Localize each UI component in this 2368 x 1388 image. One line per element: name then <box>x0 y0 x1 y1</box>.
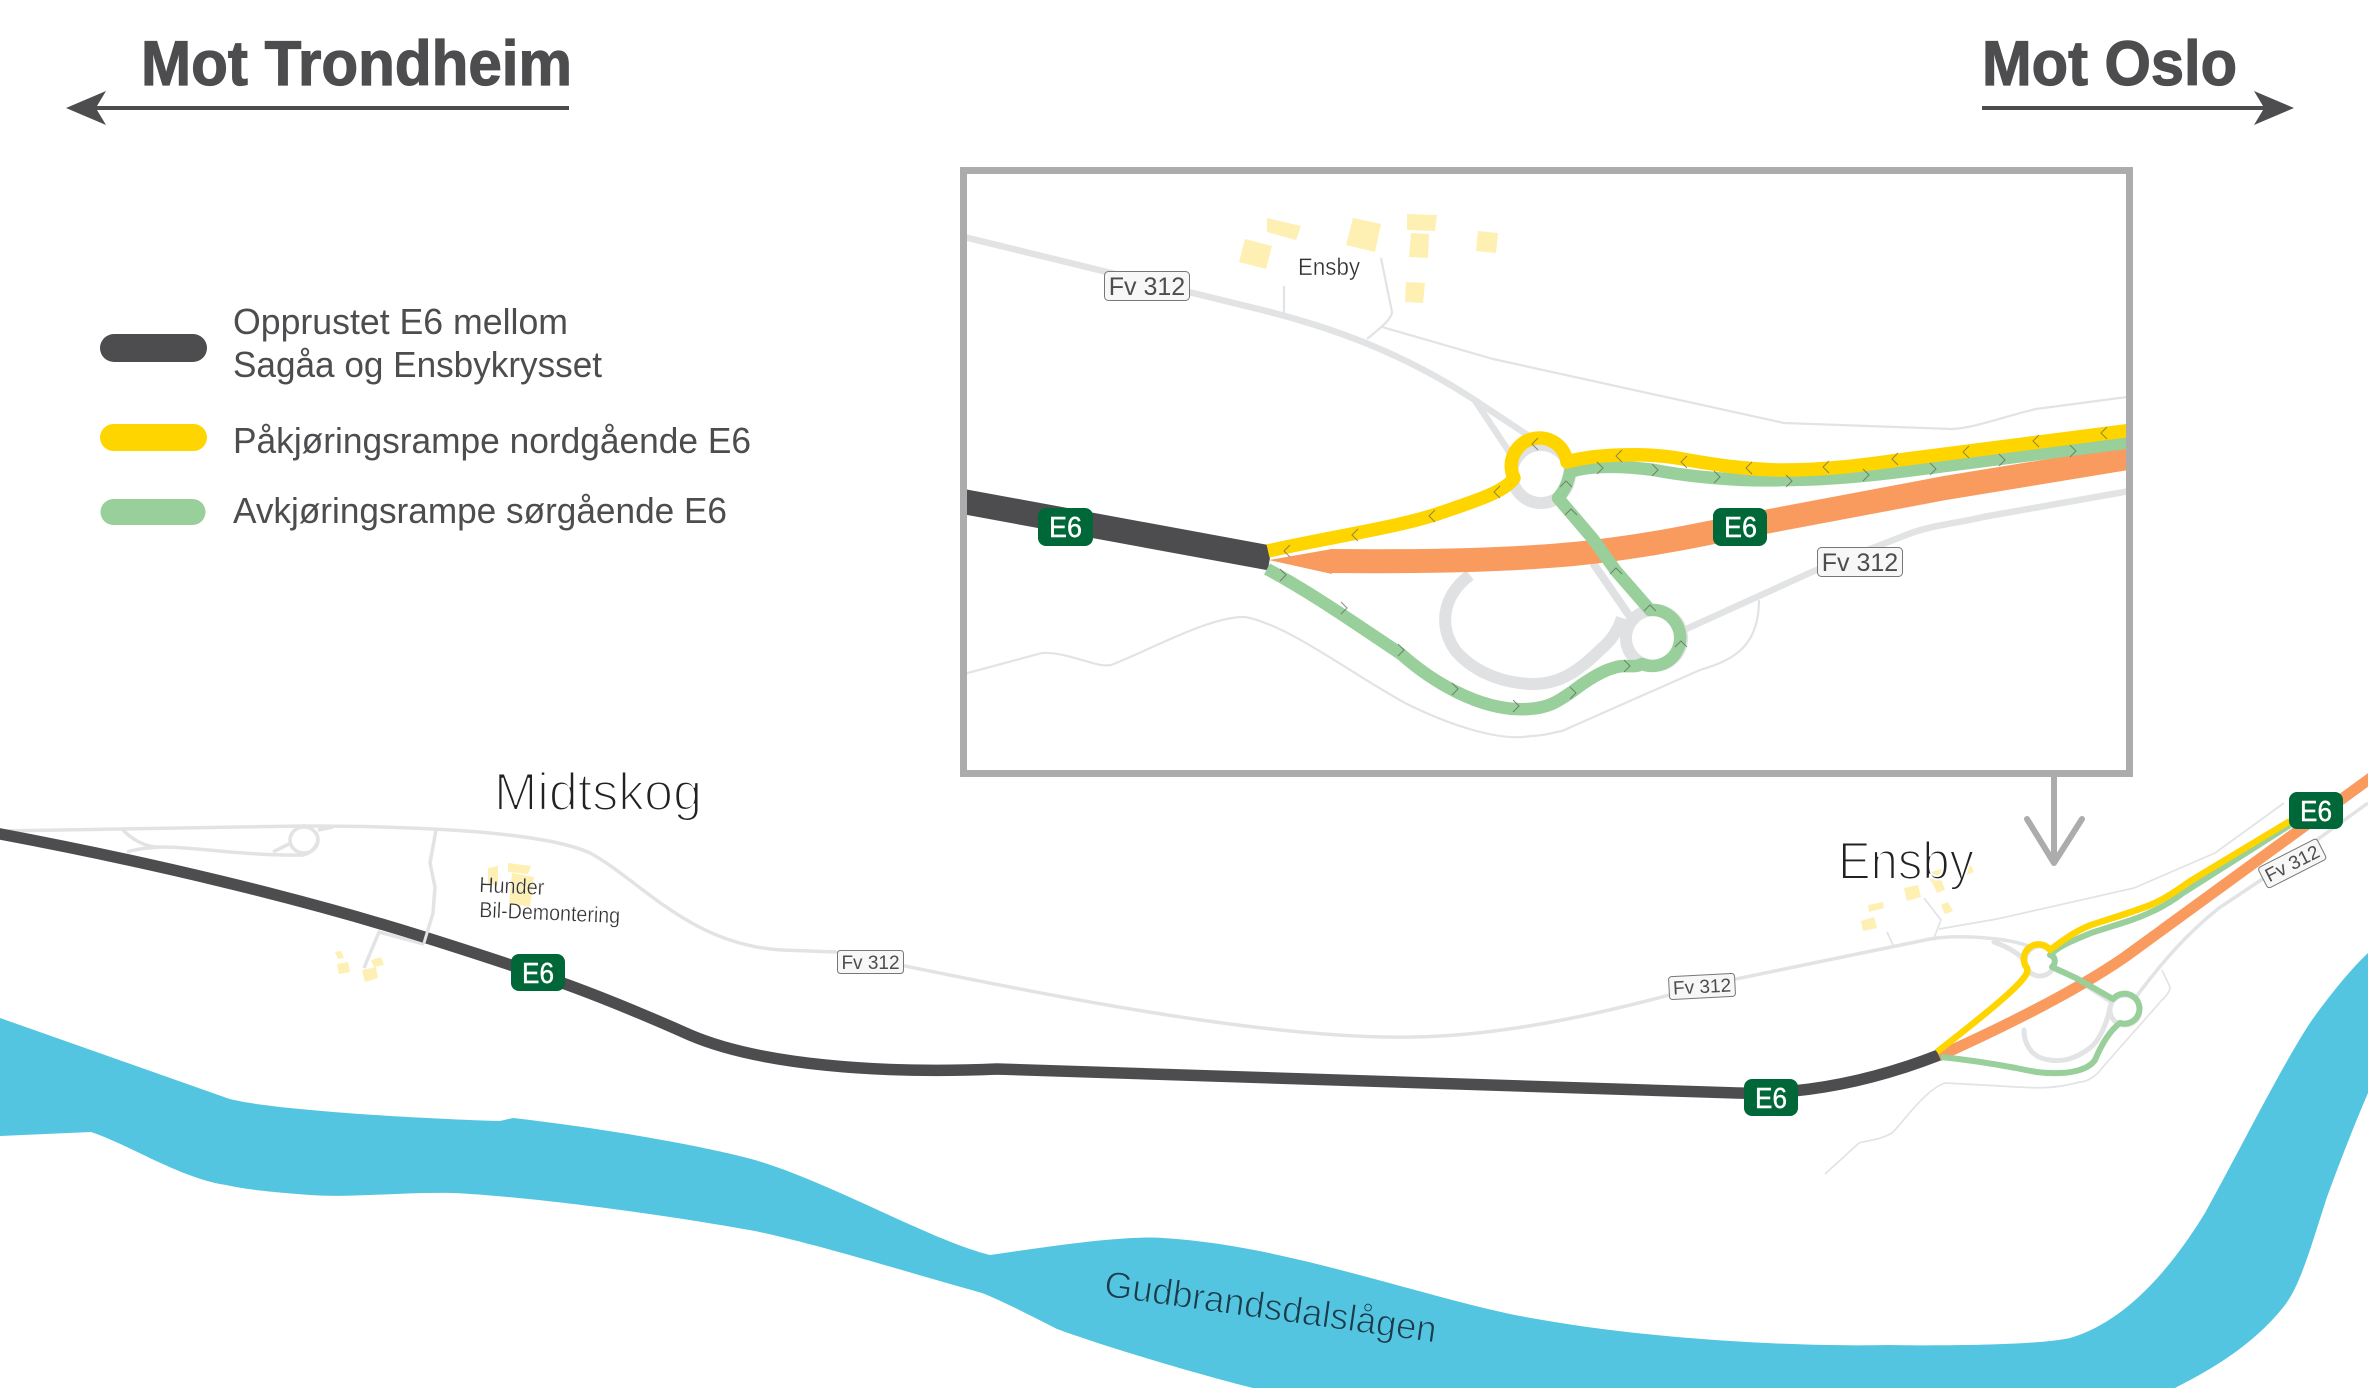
legend text: upgraded E6 <box>233 301 602 385</box>
legend swatch: off-ramp <box>100 499 206 525</box>
E6 badge: top right: E6 <box>2300 796 2332 828</box>
green ramp: main map <box>1941 825 2290 1073</box>
Fv 312 badge: middle: Fv 312 <box>1673 975 1732 1000</box>
inset Fv 312 road <box>960 236 2135 630</box>
inset orange new E6 <box>1269 456 2140 574</box>
inset E6 upgraded road <box>955 500 1270 558</box>
place label: Midtskog: Midtskog <box>494 763 702 822</box>
heading: Mot Trondheim: Mot Trondheim <box>141 29 572 99</box>
legend <box>100 301 751 531</box>
place label: Hunder Bil-Demontering <box>479 872 621 928</box>
arrow: from inset to Ensby <box>2027 777 2082 863</box>
legend text: on-ramp: Påkjøringsrampe nordgående E6 <box>233 420 751 461</box>
inset E6 badge: right <box>1713 508 1767 546</box>
interchange roads: main map <box>1994 942 2140 1061</box>
inset green ramp <box>1267 441 2140 709</box>
inset direction chevrons: off-ramp <box>1280 445 2076 712</box>
legend text: off-ramp: Avkjøringsrampe sørgående E6 <box>233 490 727 531</box>
E6 upgraded road: main map <box>0 833 1939 1093</box>
legend text: upgraded E6: Sagåa og Ensbykrysset <box>233 344 602 385</box>
place label: Ensby: Ensby <box>1838 832 1974 891</box>
inset E6 badge: left: E6 <box>1049 512 1082 544</box>
legend swatch: upgraded E6 <box>100 334 207 362</box>
Fv 312 road: main map <box>0 803 2368 1037</box>
inset E6 badge: left <box>1038 508 1093 546</box>
Fv 312 badge: left: Fv 312 <box>841 953 900 974</box>
inset interchange roads <box>1445 445 1682 684</box>
inset Fv 312 badge: top: Fv 312 <box>1109 273 1185 301</box>
E6 badge: Ensby approach: E6 <box>1755 1083 1787 1115</box>
inset frame <box>964 170 2130 774</box>
Fv 312 badge: right: Fv 312 <box>2262 842 2323 887</box>
inset yellow ramp <box>1268 429 2140 551</box>
inset minor roads <box>960 258 2127 737</box>
place label: Hunder Bil-Demontering: Hunder <box>479 872 545 900</box>
inset direction chevrons: on-ramp <box>1284 427 2107 557</box>
inset Fv 312 badge: bottom: Fv 312 <box>1822 549 1898 577</box>
E6 badge: Midtskog: E6 <box>522 958 554 990</box>
legend text: upgraded E6: Opprustet E6 mellom <box>233 301 568 342</box>
E6 badge: Midtskog <box>511 954 565 991</box>
arrow: towards Oslo <box>1982 91 2294 125</box>
inset E6 badge: right: E6 <box>1724 512 1757 544</box>
minor roads: main map <box>1825 803 2284 1174</box>
arrow: towards Trondheim <box>66 91 569 125</box>
E6 badge: top right <box>2289 792 2343 829</box>
orange new E6: main map <box>1939 777 2368 1056</box>
buildings: main map <box>335 863 1974 982</box>
yellow ramp: main map <box>1937 821 2290 1052</box>
river: Gudbrandsdalslågen <box>0 953 2368 1388</box>
legend swatch: on-ramp <box>100 424 207 451</box>
side road crossing E6 <box>424 913 433 943</box>
heading: Mot Oslo: Mot Oslo <box>1982 29 2237 99</box>
place label: Hunder Bil-Demontering: Bil-Demontering <box>479 897 621 928</box>
inset buildings <box>1239 214 1498 303</box>
panel: inset map of Ensby interchange <box>955 170 2140 774</box>
inset label: Ensby: Ensby <box>1298 254 1360 281</box>
river label: Gudbrandsdalslågen <box>1102 1263 1439 1351</box>
E6 badge: Ensby approach <box>1744 1079 1798 1116</box>
